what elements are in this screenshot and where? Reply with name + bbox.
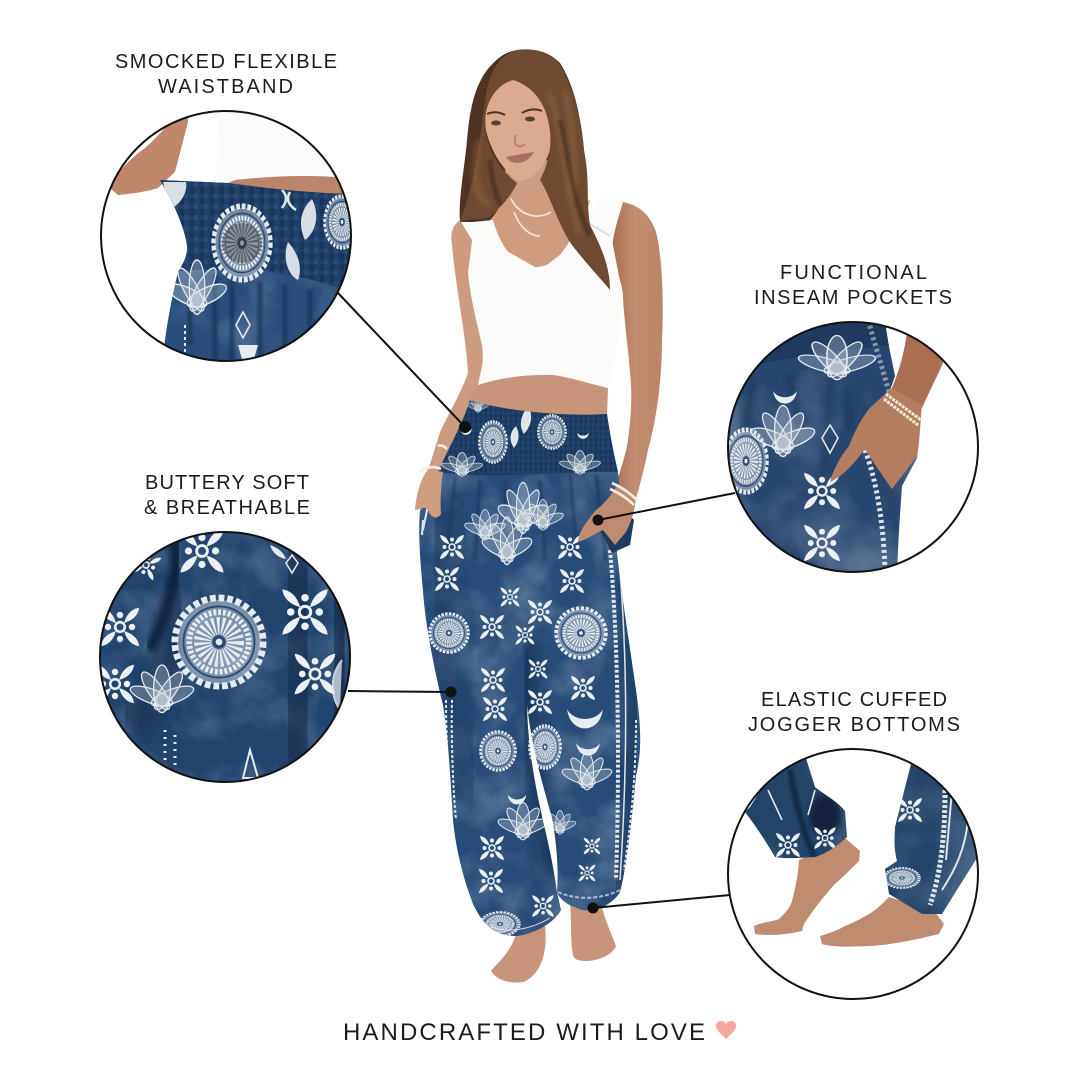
right foot <box>570 900 616 961</box>
midriff <box>468 375 608 416</box>
lotus and drop motifs <box>128 665 196 713</box>
bare arm and hand <box>111 118 188 195</box>
fabric below waistband <box>160 180 350 360</box>
heading: cuffs: JOGGER BOTTOMS <box>748 714 960 736</box>
left foot <box>491 925 546 983</box>
mandala on waistband <box>213 206 271 280</box>
face <box>485 80 552 181</box>
heading: fabric: BUTTERY SOFT <box>145 472 309 494</box>
right hand <box>578 485 636 545</box>
hand in pocket <box>830 388 922 489</box>
right pocket <box>600 500 634 553</box>
heading: cuffs: ELASTIC CUFFED <box>761 689 947 711</box>
facial features <box>487 109 542 163</box>
model wearing the pants <box>410 49 663 983</box>
icon: heart <box>716 1021 736 1039</box>
panel: waistband detail <box>100 108 359 365</box>
inner leg gap <box>527 705 558 893</box>
large mandala <box>175 598 263 686</box>
leader line: fabric <box>348 686 456 698</box>
hair front strands <box>460 49 610 290</box>
heading: waistband: WAISTBAND <box>158 76 293 98</box>
heading: pockets: INSEAM POCKETS <box>754 287 952 309</box>
waistband smocking <box>762 323 889 364</box>
heading: fabric <box>144 472 310 519</box>
bracelet <box>884 394 921 425</box>
leader line: pockets <box>592 493 735 526</box>
left hand <box>415 469 443 517</box>
necklace <box>511 198 551 236</box>
lotus motif <box>172 259 227 316</box>
leader line: waistband <box>338 293 471 433</box>
gathers <box>447 474 606 560</box>
white crop top <box>468 198 623 388</box>
heading: pockets <box>754 262 952 309</box>
footer tagline: HANDCRAFTED WITH LOVE <box>343 1019 705 1046</box>
heading: pockets: FUNCTIONAL <box>780 262 927 284</box>
pants fabric <box>725 320 925 580</box>
heading: waistband <box>115 51 337 98</box>
heading: waistband: SMOCKED FLEXIBLE <box>115 51 337 73</box>
pant print motifs <box>422 482 636 936</box>
hair back <box>460 50 587 250</box>
white top <box>217 108 340 180</box>
neck and chest <box>490 160 590 270</box>
right arm <box>612 202 663 498</box>
midriff <box>228 176 346 194</box>
panel: cuff detail <box>725 745 990 1001</box>
heading: cuffs <box>748 689 960 736</box>
pocket side seam <box>865 450 885 572</box>
left foot <box>754 838 860 935</box>
patterned pants <box>419 400 640 936</box>
right cuff <box>885 764 976 914</box>
arm <box>890 332 945 408</box>
right foot <box>820 897 944 947</box>
panel: pocket detail <box>725 320 981 580</box>
smocked band <box>160 180 350 288</box>
smocked waistband <box>438 396 618 477</box>
bracelets <box>420 445 638 505</box>
panel: fabric detail <box>96 529 352 784</box>
left cuff <box>745 759 847 858</box>
heading: fabric: & BREATHABLE <box>144 497 310 519</box>
leader line: cuffs <box>588 895 730 914</box>
left arm <box>428 220 484 474</box>
small flowers <box>180 529 224 573</box>
mandala and motifs <box>725 430 767 492</box>
